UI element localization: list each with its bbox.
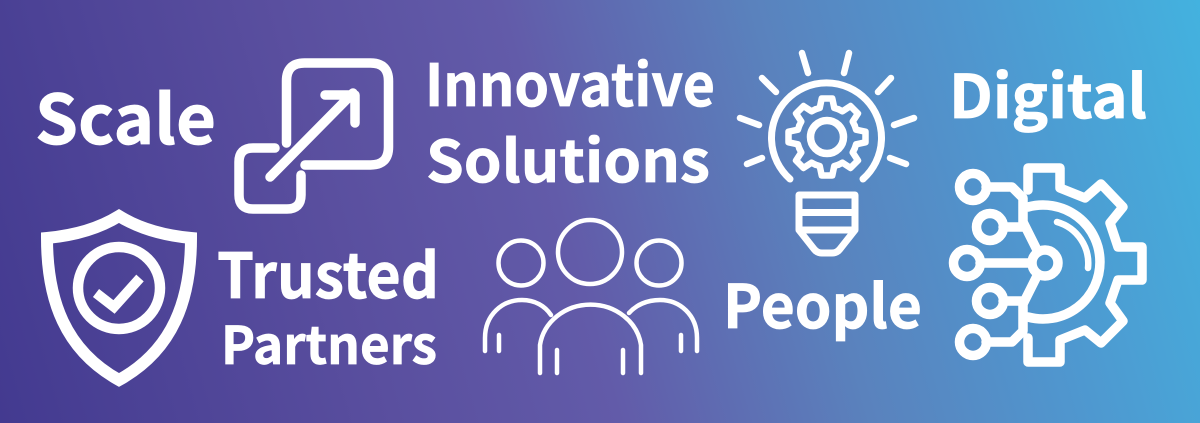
heading: Innovative Solutions (425, 39, 715, 199)
bulb base (799, 195, 855, 253)
icon: digital gear with circuit nodes (954, 168, 1142, 362)
circuit lines (980, 187, 1038, 342)
heads (498, 240, 544, 286)
heading: Trusted Partners: Partners (221, 304, 437, 379)
right body (629, 300, 697, 351)
circuit nodes (954, 174, 1058, 356)
icon: scale arrow in squares (239, 63, 388, 209)
center body (540, 305, 641, 373)
icon: group of people (485, 220, 697, 373)
heading: People: People (723, 259, 922, 346)
heading: Digital: Digital (949, 49, 1147, 136)
left body (485, 300, 551, 351)
half circle (1028, 205, 1100, 319)
inner arc (1057, 222, 1088, 268)
gear outline (1028, 168, 1142, 362)
bulb rays (740, 53, 914, 164)
bulb glass arc (772, 83, 882, 179)
icon: shield with check mark (47, 216, 191, 380)
heading: Trusted Partners (217, 226, 439, 379)
bulb gear (788, 98, 866, 176)
heading: Innovative Solutions: Innovative (425, 39, 715, 123)
heading: Scale: Scale (35, 65, 216, 164)
heading: Innovative Solutions: Solutions (426, 115, 710, 199)
icon: light bulb with gear (740, 53, 914, 253)
heading: Trusted Partners: Trusted (217, 226, 439, 316)
